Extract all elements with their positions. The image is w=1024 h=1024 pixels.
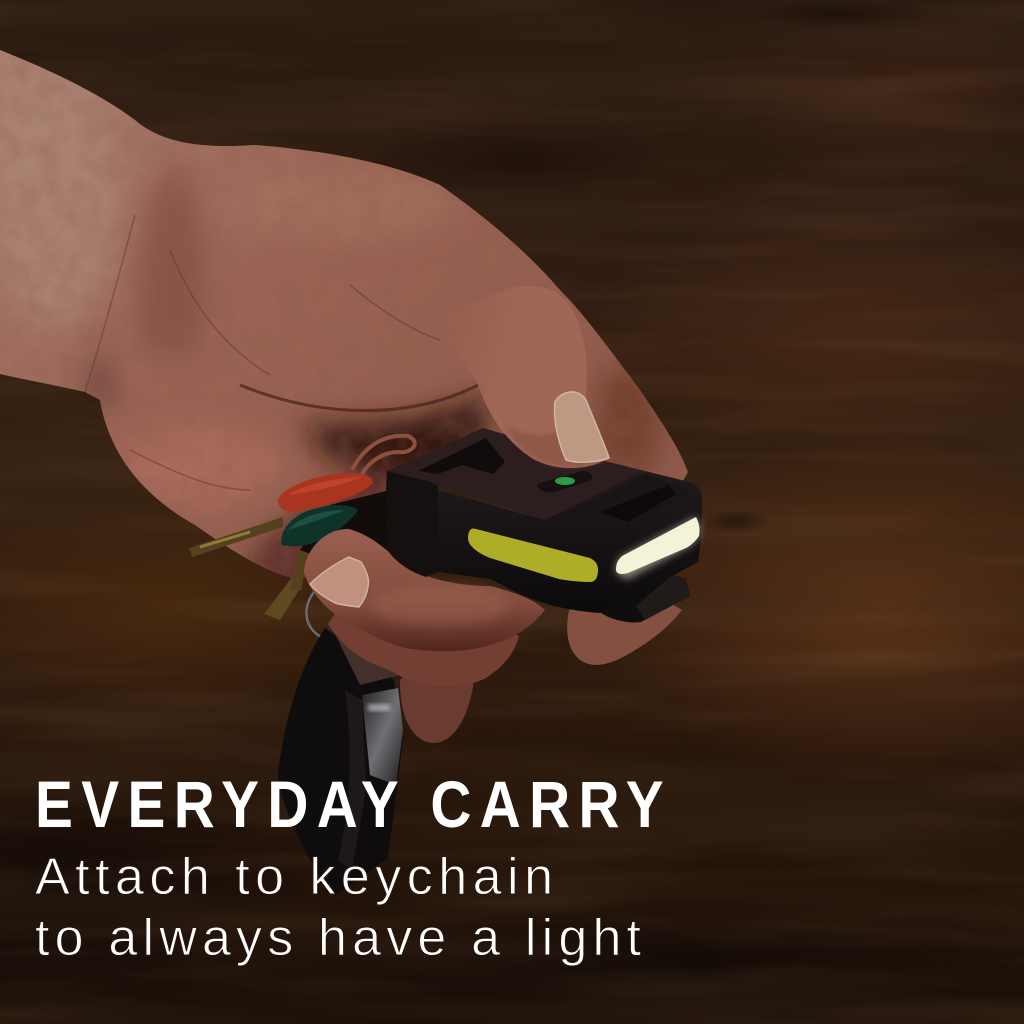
index finger nail <box>310 557 369 607</box>
key ring <box>306 592 332 641</box>
headline: EVERYDAY CARRY <box>35 768 664 842</box>
thumb over device <box>440 286 609 468</box>
yellow COB strip <box>468 528 598 582</box>
lit white lens <box>616 517 700 574</box>
hand and forearm <box>0 40 700 600</box>
lowest finger tip <box>400 640 476 743</box>
subheading line 1: Attach to keychain <box>35 848 553 906</box>
subheading line 2: to always have a light <box>35 909 642 967</box>
top plate <box>387 428 645 520</box>
front window frame <box>554 474 690 527</box>
rear housing block <box>386 471 438 577</box>
car key fob <box>278 628 403 896</box>
top notch <box>418 438 505 474</box>
little finger behind device <box>567 585 682 665</box>
gripping fingers <box>304 529 545 686</box>
light body <box>438 471 702 613</box>
flashlight device <box>386 428 702 623</box>
rear clip <box>600 575 690 623</box>
shading clipped to hand <box>0 40 700 600</box>
keyring loop <box>352 436 415 474</box>
thumb nail <box>555 392 609 462</box>
thumb underside crease <box>240 385 478 411</box>
knuckle creases <box>85 215 440 490</box>
brass keys <box>189 517 306 620</box>
red and green key tags <box>278 473 390 565</box>
power button <box>537 471 593 493</box>
green indicator <box>555 477 575 485</box>
lit lens glow <box>616 517 700 579</box>
